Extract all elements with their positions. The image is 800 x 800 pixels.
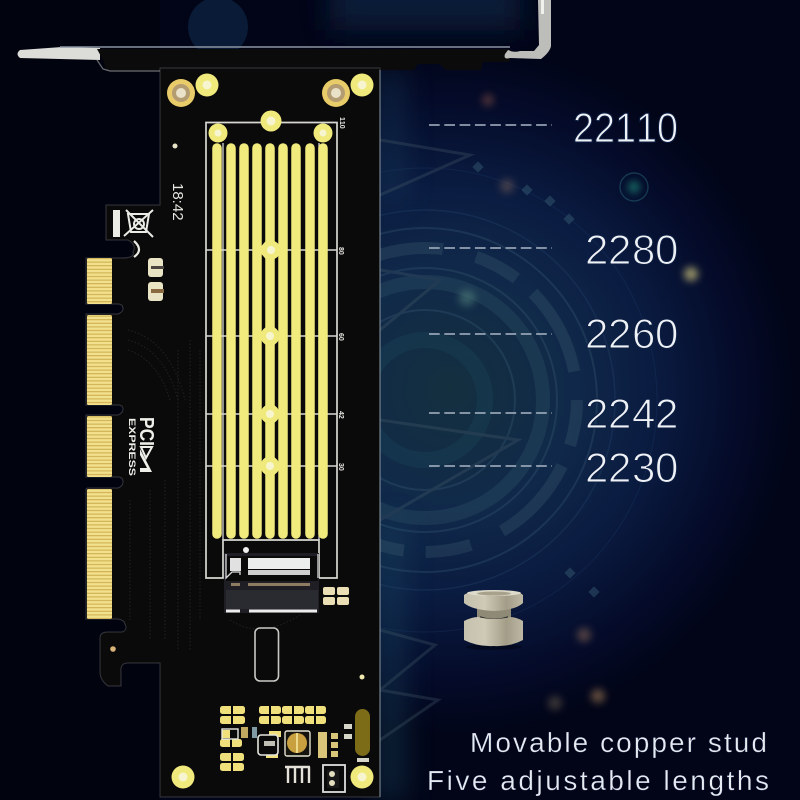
silkscreen length numbers: 110 xyxy=(338,117,345,129)
silkscreen length numbers: 30 xyxy=(337,463,344,471)
length labels: 2242 xyxy=(585,390,678,437)
PCIe gold edge connector xyxy=(87,258,112,619)
silkscreen length numbers: 42 xyxy=(337,411,344,419)
silkscreen length numbers: 60 xyxy=(337,333,344,341)
length labels: 2230 xyxy=(585,444,678,491)
M.2 slot outline and length lines xyxy=(206,122,337,578)
bracket screw pads xyxy=(167,74,374,148)
small resistor pads beside socket xyxy=(323,587,349,605)
length labels: 2260 xyxy=(585,310,678,357)
dashed leader lines xyxy=(429,125,552,466)
bracket: metal mounting plate xyxy=(18,0,551,71)
length labels: 22110 xyxy=(573,104,678,151)
icon: crossed-out recycling bin xyxy=(113,210,153,257)
silkscreen date code: 18:42 xyxy=(169,183,186,221)
caption: Movable copper stud xyxy=(470,727,767,758)
PCI Express logo xyxy=(127,417,157,476)
background: concentric tech rings xyxy=(193,140,657,740)
length labels xyxy=(573,104,678,491)
small SMD components near top xyxy=(148,258,164,301)
silkscreen length numbers: 80 xyxy=(337,247,344,255)
PCB: black circuit board xyxy=(86,68,380,797)
caption: Five adjustable lengths xyxy=(427,765,769,796)
power circuit components xyxy=(220,706,370,792)
silkscreen length numbers xyxy=(337,117,345,471)
background: glowing light dots xyxy=(459,94,698,710)
yellow heat-sink trace bars xyxy=(217,148,323,534)
mounting slot outline xyxy=(255,628,278,681)
corner mounting pads xyxy=(110,646,373,788)
faint moire trace pattern xyxy=(128,330,300,650)
M.2 connector socket xyxy=(224,547,319,613)
copper stud photo xyxy=(464,590,523,650)
PCI Express logo: PCI xyxy=(135,417,157,446)
PCI Express logo: EXPRESS xyxy=(127,418,137,476)
caption xyxy=(427,727,769,796)
standoff pads along length positions xyxy=(208,110,332,480)
length labels: 2280 xyxy=(585,226,678,273)
